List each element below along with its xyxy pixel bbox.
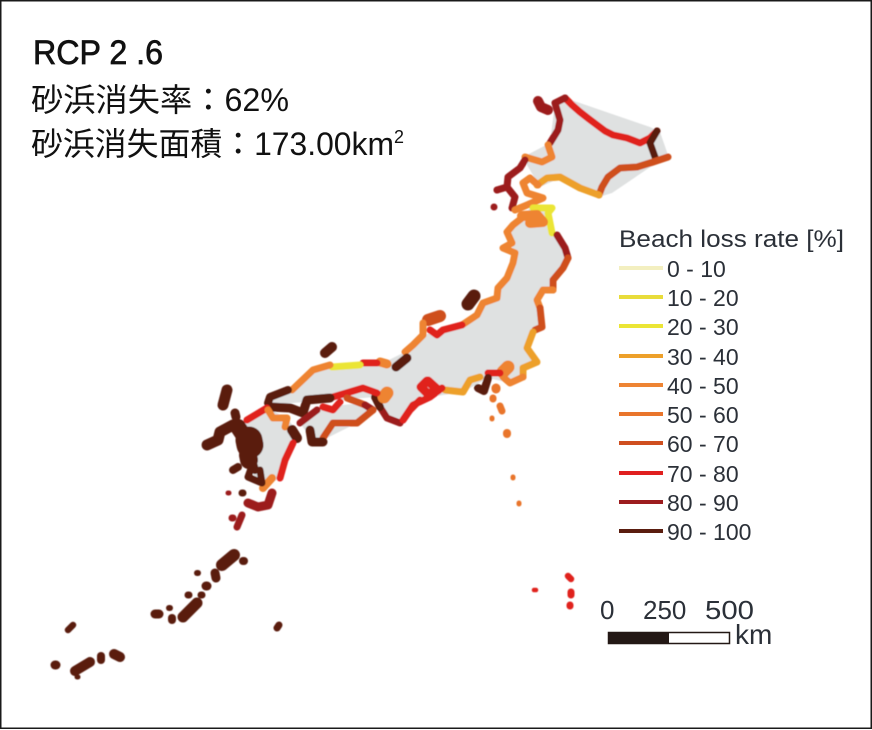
coast: Honshu [268,208,568,423]
map of Japan [55,98,668,677]
legend item 50-60: 50 - 60 [667,402,739,428]
legend [619,226,844,545]
dark islands and west Kyushu [207,296,474,493]
legend item 10-20 [619,285,739,311]
legend item 90-100: 90 - 100 [667,519,751,545]
legend item 50-60 [619,402,739,428]
legend item 10-20: 10 - 20 [667,285,739,311]
Nansei islands [55,555,279,677]
legend item 70-80 [619,461,739,487]
scale bar [600,595,772,650]
scale numbers: 250 [643,595,686,625]
scale numbers [600,595,754,625]
legend item 70-80: 70 - 80 [667,461,739,487]
legend title: Beach loss rate [%] [619,226,844,253]
Ogasawara islands [534,576,571,606]
scale bar graphic [608,632,730,644]
legend item 20-30 [619,314,739,340]
Izu islands [492,388,519,504]
scale unit: km [735,619,772,650]
beach loss area text: 砂浜消失面積：173.00km [31,126,396,162]
legend item 90-100 [619,519,751,545]
coast: Hokkaido [497,98,668,210]
land masses [243,98,668,488]
legend item 30-40 [619,344,739,370]
scale numbers: 500 [705,595,754,625]
legend item 0-10 [619,256,726,282]
legend item 60-70 [619,431,739,457]
legend item 20-30: 20 - 30 [667,314,739,340]
legend item 30-40: 30 - 40 [667,344,739,370]
legend item 40-50: 40 - 50 [667,373,739,399]
legend item 80-90 [619,490,739,516]
coast: Shikoku [300,398,373,442]
legend item 40-50 [619,373,739,399]
legend item 60-70: 60 - 70 [667,431,739,457]
beach loss area text: 2 [394,127,404,147]
Osumi islands [228,101,548,527]
legend item 80-90: 80 - 90 [667,490,739,516]
legend item 0-10: 0 - 10 [667,256,726,282]
beach loss rate text: 砂浜消失率：62% [31,82,289,118]
coast: Kyushu [247,408,297,488]
scale numbers: 0 [600,595,614,625]
title: RCP 2 .6 [33,34,163,72]
